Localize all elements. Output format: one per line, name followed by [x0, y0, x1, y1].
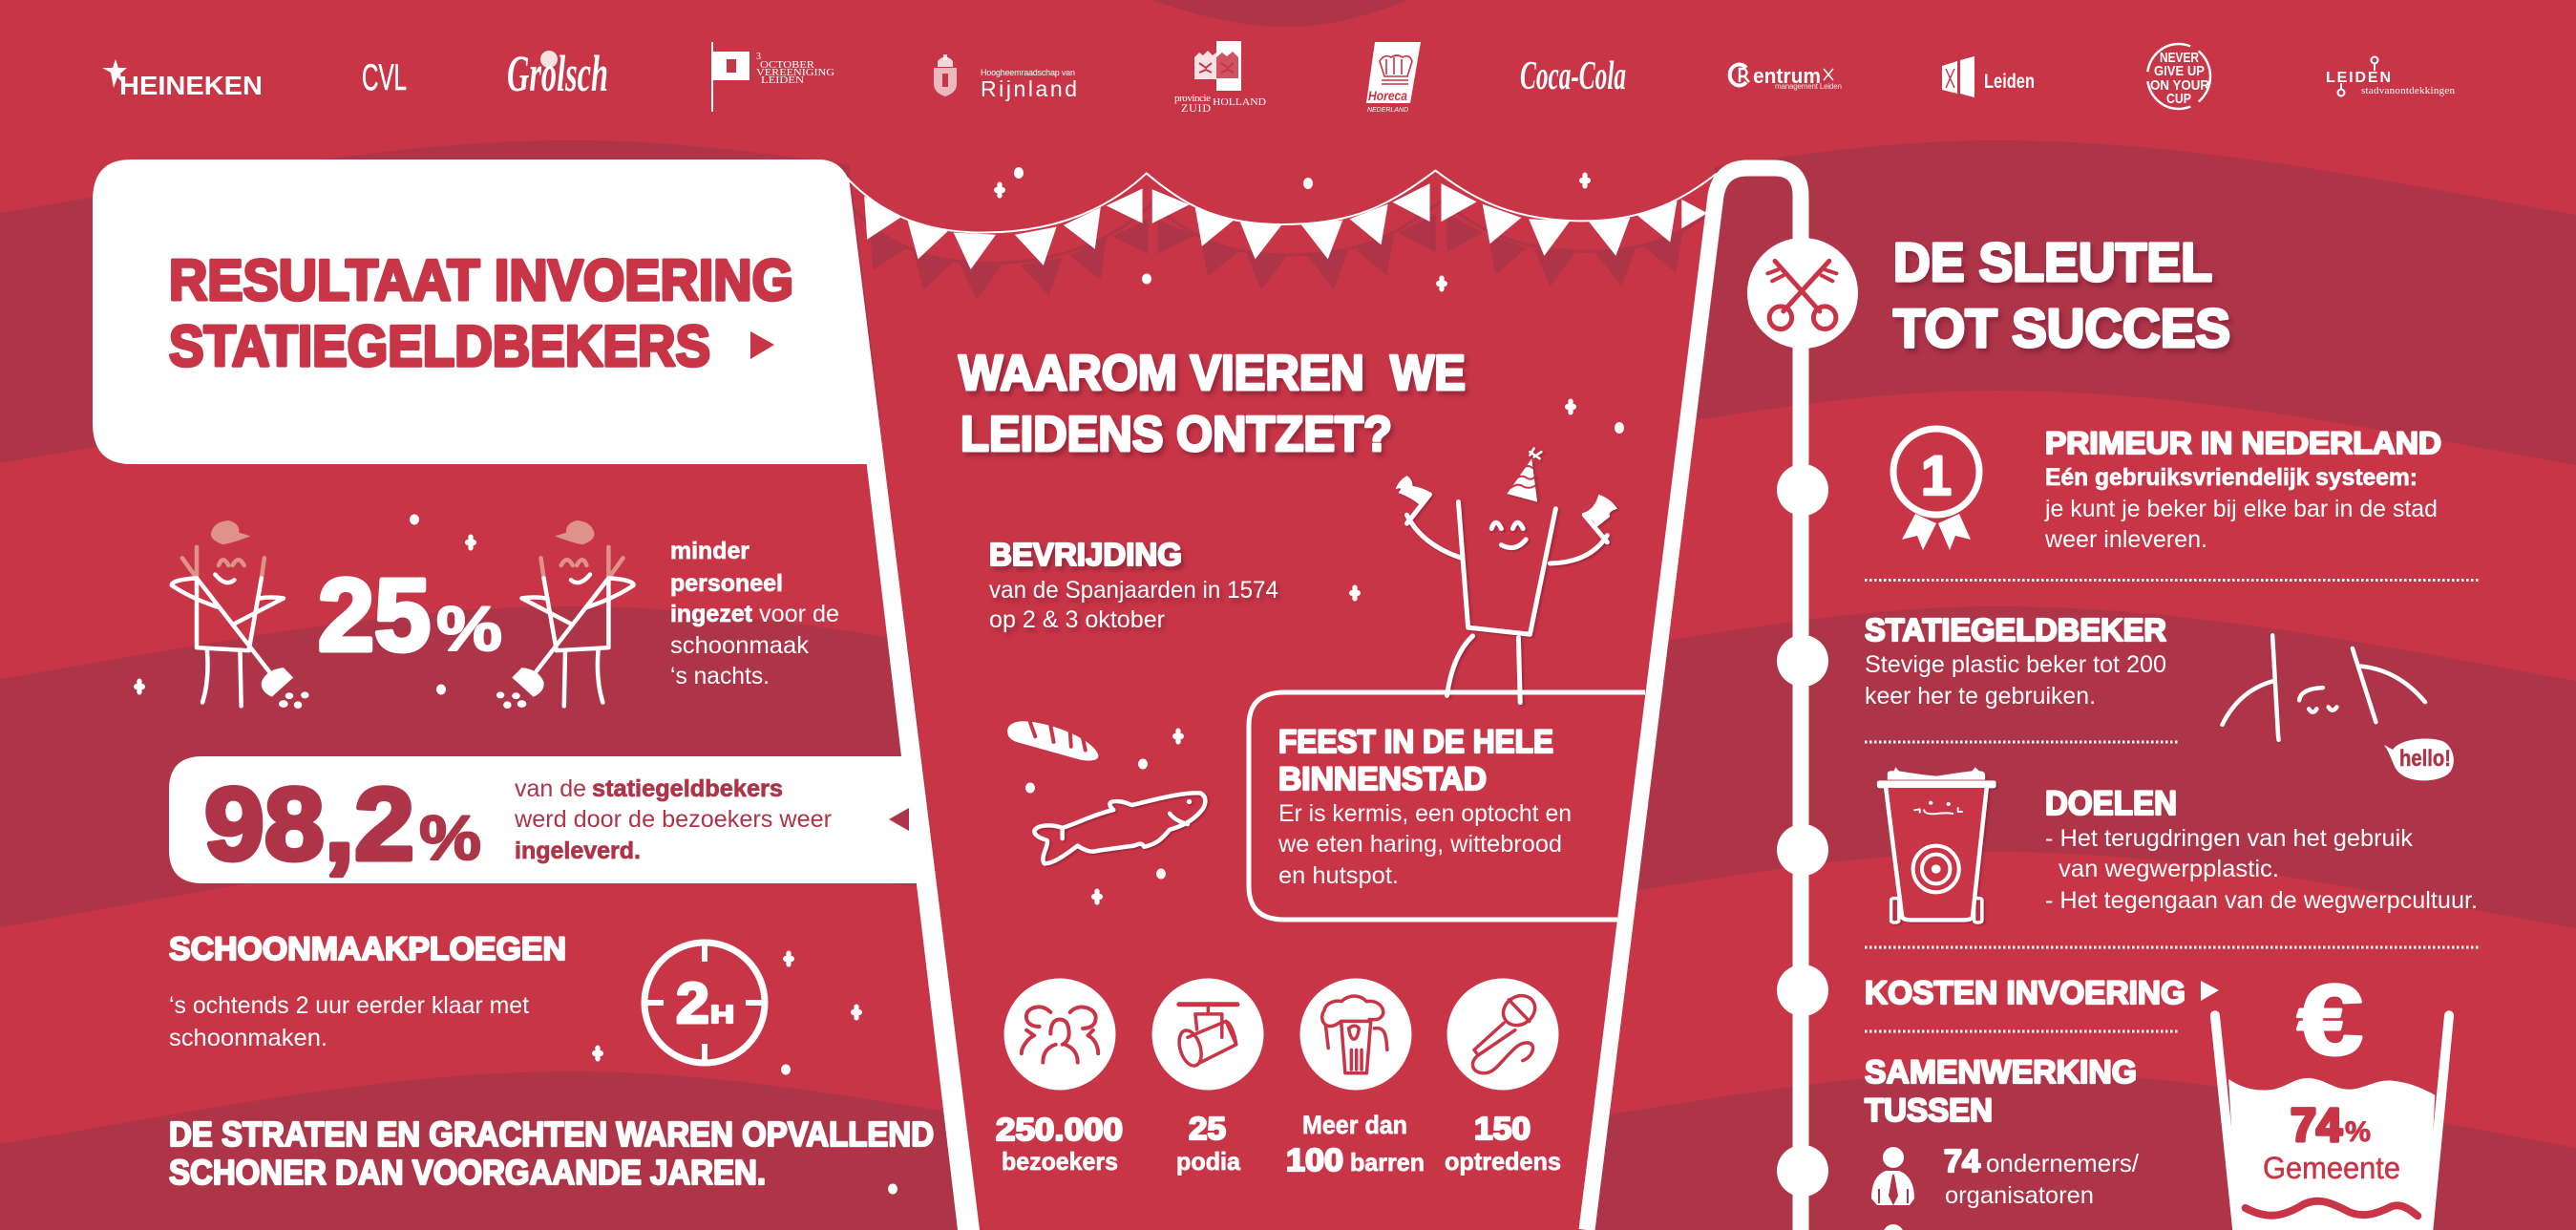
heading: de sleutel tot succes: DE SLEUTEL [1893, 232, 2212, 293]
text: 74 ondernemers [1944, 1143, 2140, 1209]
stat: 25 podia: podia [1176, 1147, 1241, 1176]
text: statiegeldbekers: van de [515, 775, 586, 802]
logo: Horeca Nederland: NEDERLAND [1367, 107, 1408, 114]
logo: 3 October Vereeniging: OCTOBER [760, 60, 814, 71]
icon: medal 1 [1893, 429, 1979, 550]
callout: hello [2384, 738, 2454, 780]
heading: waarom vieren we [959, 346, 1466, 462]
text: samenwerking tussen [1865, 1054, 2137, 1129]
text: minder personeel: schoonmaak [670, 632, 810, 659]
bunting [843, 171, 1716, 269]
text: bevrijding [989, 537, 1278, 633]
text: doelen: van wegwerpplastic. [2059, 856, 2279, 882]
icon: clock 2H: 2 [676, 971, 709, 1035]
logo: Provincie Zuid-Holland: provincie [1174, 93, 1211, 104]
logo: Horeca Nederland [1366, 42, 1421, 114]
icon: herring fish [1034, 793, 1205, 863]
text: minder personeel: minder [670, 538, 750, 564]
text: minder personeel: personeel [670, 570, 783, 597]
logo: Centrum management Leiden [1730, 64, 1842, 91]
text: statiegeldbeker [1865, 612, 2166, 710]
cup interior [849, 162, 1716, 1230]
text: minder personeel: ‘s nachts. [670, 663, 770, 689]
text: doelen: - Het terugdringen van het gebruik [2045, 825, 2413, 852]
text: doelen: - Het tegengaan van de wegwerpcultuur. [2045, 887, 2478, 914]
text: statiegeldbeker: STATIEGELDBEKER [1865, 612, 2166, 647]
heading [1278, 724, 1553, 797]
logo: 3 October Vereeniging: 3 [756, 52, 761, 62]
chart: cost bucket: Gemeente [2263, 1151, 2400, 1185]
stat: 98,2%: 98,2 [204, 766, 414, 881]
logo: Never give up on your cup: CUP [2166, 91, 2191, 107]
text: minder personeel: ingezet [670, 601, 753, 627]
logo: Heineken [102, 59, 263, 100]
logo: Rijnland: Hoogheemraadschap van [981, 68, 1075, 77]
logo: Leiden stad van ontdekkingen: LEIDEN [2326, 70, 2391, 86]
heading: resultaat invoering: RESULTAAT INVOERING [169, 248, 793, 312]
body text: we eten haring, wittebrood [1277, 831, 1562, 858]
cup outline: right wall and rim [1587, 168, 1801, 1230]
stat: 250.000 bezoekers: 250.000 [996, 1112, 1123, 1147]
text: statiegeldbekers: ingeleverd. [515, 838, 641, 864]
logo: Rijnland: Rijnland [981, 76, 1077, 101]
text: primeur in nederland [2044, 426, 2441, 553]
text: primeur in nederland: weer inleveren. [2044, 526, 2207, 553]
card: 98,2% [169, 756, 919, 883]
text: bevrijding: BEVRIJDING [989, 537, 1182, 572]
text: 74 ondernemers: ondernemers/ [1986, 1149, 2140, 1177]
panel: feest in de hele binnenstad [1249, 692, 1645, 920]
heading: waarom vieren we: LEIDENS ONTZET? [961, 407, 1392, 462]
icon: second person [1883, 1224, 1904, 1230]
stat: 25 podia: 25 [1189, 1111, 1226, 1146]
logo: 3 October Vereeniging [711, 42, 834, 112]
logo: Grolsch: Grolsch [507, 45, 608, 102]
illustration: sweeping cup right [496, 520, 634, 709]
text: statiegeldbeker: Stevige plastic beker tot 200 [1865, 651, 2166, 678]
logo: Never give up on your cup: NEVER [2160, 50, 2199, 66]
stat: meer dan 100 barren: Meer dan [1302, 1111, 1407, 1139]
heading: waarom vieren we: WAAROM VIEREN WE [959, 346, 1466, 401]
logo: Centrum management Leiden: management Leiden [1775, 82, 1842, 91]
stat: 25%: 25 [318, 557, 431, 672]
logo: Leiden stad van ontdekkingen: stadvanontdekkingen [2361, 85, 2456, 96]
logo: Rijnland [934, 54, 1077, 101]
illustration: party cup [1396, 449, 1617, 703]
text: bevrijding: op 2 & 3 oktober [989, 606, 1165, 633]
icon: bread [1007, 721, 1098, 761]
text: samenwerking tussen: SAMENWERKING [1865, 1054, 2137, 1091]
logo: Horeca Nederland: Horeca [1368, 88, 1407, 103]
logo: Provincie Zuid-Holland [1174, 41, 1266, 115]
chart: cost bucket: 74 [2291, 1100, 2342, 1152]
heading: resultaat invoering [169, 248, 793, 378]
sparkles [134, 167, 1624, 1194]
logo: Never give up on your cup: ON YOUR [2150, 77, 2209, 94]
stat: meer dan 100 barren [1286, 978, 1425, 1177]
chart: cost bucket: % [2345, 1116, 2371, 1148]
stat: 150 optredens: 150 [1474, 1111, 1531, 1146]
timeline nodes [1777, 464, 1828, 1197]
text: primeur in nederland: je kunt je beker bij elke bar in de stad [2044, 496, 2438, 522]
chart: cost bucket [2215, 1015, 2449, 1230]
logo: Heineken: HEINEKEN [119, 71, 263, 100]
stat: 250.000 bezoekers [996, 978, 1123, 1176]
stat: meer dan 100 barren: 100 [1286, 1142, 1343, 1177]
text: statiegeldbekers [514, 775, 832, 864]
text: schoonmaakploegen: SCHOONMAAKPLOEGEN [169, 931, 566, 967]
body text: Er is kermis, een optocht en [1278, 800, 1572, 827]
heading: BINNENSTAD [1278, 761, 1487, 797]
bunting shadow [849, 201, 1721, 300]
stat: 25 podia [1151, 978, 1264, 1176]
heading: FEEST IN DE HELE [1278, 724, 1553, 760]
body text [1277, 800, 1572, 889]
stat: 25% [318, 557, 502, 672]
text: schoonmaakploegen [169, 931, 566, 1051]
cup outline: left wall [833, 178, 980, 1230]
text: statiegeldbeker: keer her te gebruiken. [1865, 683, 2096, 710]
logo: Grolsch [507, 45, 608, 102]
logo: 3 October Vereeniging: LEIDEN [761, 75, 804, 86]
arrow [889, 808, 909, 831]
stat: 98,2%: % [419, 802, 481, 873]
callout: hello: hello! [2399, 746, 2451, 772]
logo: Provincie Zuid-Holland: HOLLAND [1213, 96, 1266, 108]
text: straten en grachten: SCHONER DAN VOORGAANDE JAREN. [169, 1153, 766, 1192]
text: primeur in nederland: PRIMEUR IN NEDERLAND [2045, 426, 2441, 460]
logo: Leiden [1942, 56, 2035, 97]
text: bevrijding: van de Spanjaarden in 1574 [989, 577, 1278, 604]
stat: 150 optredens: optredens [1445, 1147, 1561, 1176]
text: schoonmaakploegen: schoonmaken. [169, 1025, 327, 1051]
icon: waste bin [1877, 767, 1996, 922]
text: 74 ondernemers: 74 [1944, 1143, 1981, 1178]
logo: Never give up on your cup [2147, 44, 2210, 109]
icon: clock 2H [644, 943, 765, 1063]
icon: crossed keys [1747, 238, 1858, 349]
text: straten en grachten: DE STRATEN EN GRACHTEN WAREN OPVALLEND [169, 1114, 934, 1154]
logo: 3 October Vereeniging: VEREENIGING [756, 68, 834, 78]
heading: de sleutel tot succes: TOT SUCCES [1893, 298, 2230, 359]
stat: 25%: % [436, 593, 502, 664]
text: doelen [2045, 785, 2478, 914]
text: straten en grachten [169, 1114, 934, 1192]
heading: de sleutel tot succes [1893, 232, 2230, 359]
illustration: peeking cup [2222, 635, 2425, 740]
logo: CVL: CVL [362, 57, 407, 98]
logo: Provincie Zuid-Holland: ZUID [1181, 101, 1211, 115]
panel: title [93, 159, 868, 464]
text: minder personeel: voor de [759, 601, 839, 627]
text: statiegeldbekers: werd door de bezoekers weer [514, 806, 832, 833]
body text: en hutspot. [1278, 862, 1399, 889]
logo: Leiden: Leiden [1984, 71, 2035, 93]
text: doelen: DOELEN [2045, 785, 2177, 822]
logo: Never give up on your cup: GIVE UP [2154, 63, 2205, 79]
text: 74 ondernemers: organisatoren [1945, 1182, 2094, 1209]
stat: meer dan 100 barren: barren [1350, 1148, 1425, 1177]
text: euro sign: € [2297, 965, 2363, 1076]
icon: medal 1: 1 [1921, 445, 1952, 507]
text: statiegeldbekers: statiegeldbekers [592, 775, 783, 802]
logo: Centrum management Leiden: entrum [1753, 64, 1821, 88]
text: samenwerking tussen: TUSSEN [1865, 1092, 1993, 1129]
heading: resultaat invoering: STATIEGELDBEKERS [169, 314, 710, 378]
arrow [750, 331, 774, 359]
logo: Coca-Cola: Coca-Cola [1520, 54, 1626, 98]
illustration: sweeping cup left [172, 520, 309, 709]
text: primeur in nederland: Eén gebruiksvriendelijk systeem: [2045, 464, 2418, 491]
stat: 250.000 bezoekers: bezoekers [1002, 1147, 1118, 1176]
icon: businessperson [1871, 1147, 1914, 1205]
text: schoonmaakploegen: ‘s ochtends 2 uur eerder klaar met [169, 992, 529, 1019]
stat: 150 optredens [1445, 978, 1561, 1176]
arrow [2201, 981, 2219, 1001]
text: minder personeel [670, 538, 839, 689]
icon: clock 2H: H [710, 1000, 734, 1029]
logo: Leiden stad van ontdekkingen [2326, 57, 2456, 96]
text: kosten invoering: KOSTEN INVOERING [1865, 975, 2185, 1011]
